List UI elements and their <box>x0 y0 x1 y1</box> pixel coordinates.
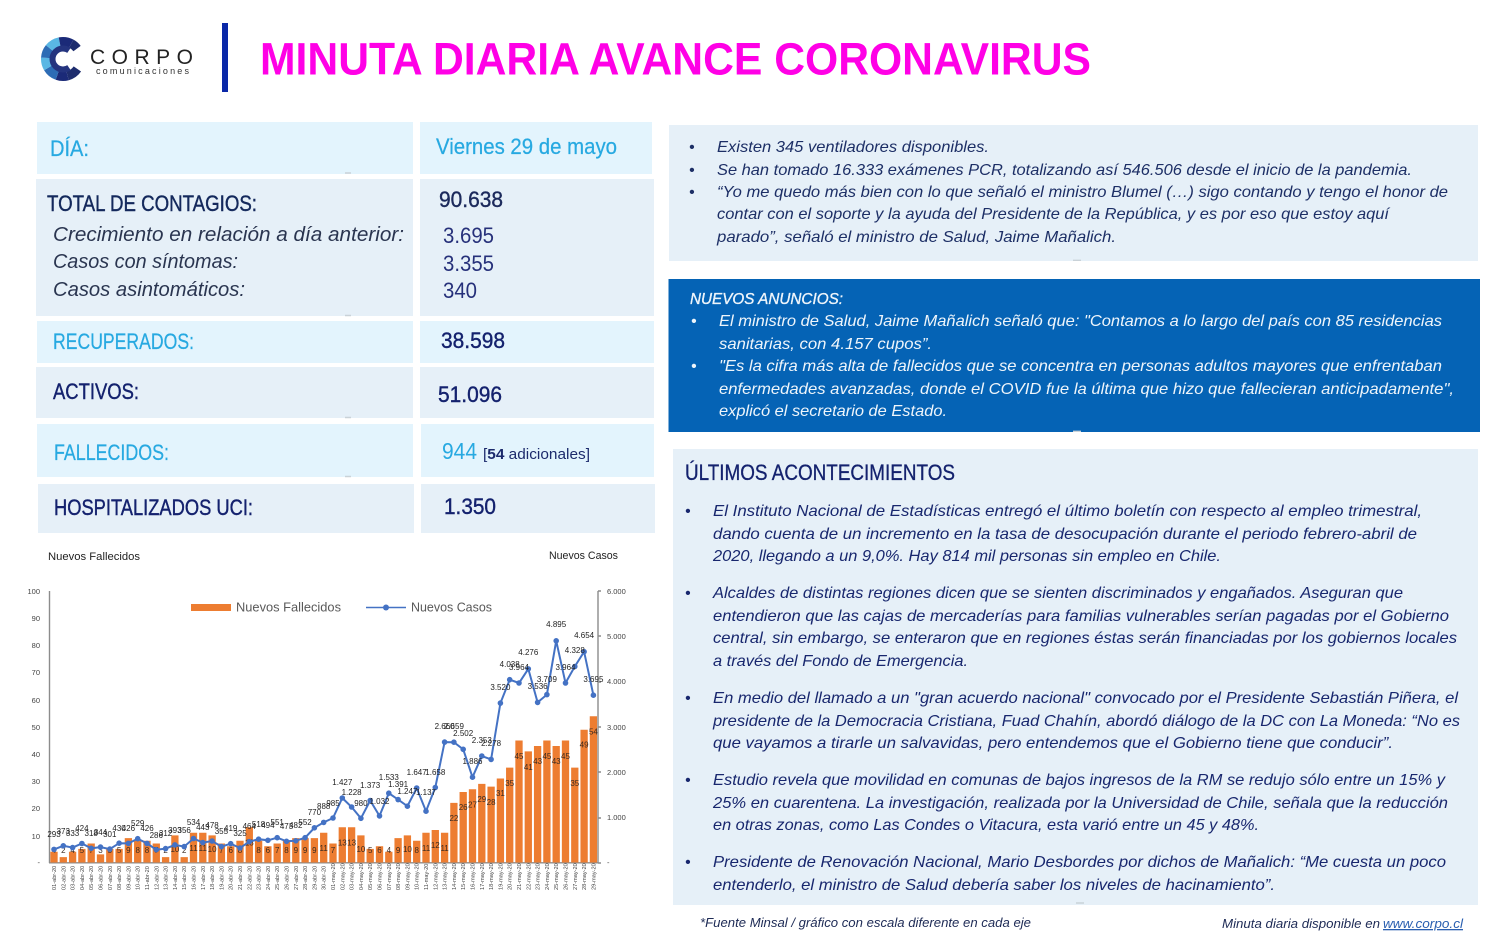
bar value labels: 49 <box>580 740 589 750</box>
left axis scale: 30 <box>32 777 40 786</box>
date axis labels: 27-abr-20 <box>294 866 300 890</box>
panel: últimos acontecimientos <box>673 449 1478 905</box>
bar value labels: 43 <box>533 757 543 766</box>
item: movilidad: 25% en cuarentena. La investigación, realizada por la Universidad de Chile, señala que la reducción <box>712 795 1448 812</box>
panel: hospitalizados UCI: HOSPITALIZADOS UCI: <box>54 495 253 520</box>
date axis labels: 26-may-20 <box>564 863 570 890</box>
panel: fallecidos: FALLECIDOS: <box>54 440 169 465</box>
panel: nuevos anuncios: sanitarias, con 4.157 cupos”. <box>719 336 932 353</box>
date axis labels: 16-may-20 <box>470 863 476 890</box>
item: empleo: 2020, llegando a un 9,0%. Hay 814 mil personas sin empleo en Chile. <box>712 548 1221 565</box>
legend <box>191 600 492 614</box>
line value labels: 344 <box>94 828 108 837</box>
item: empleo <box>685 503 1422 565</box>
line value labels: 355 <box>215 827 229 836</box>
item: acuerdo nacional: En medio del llamado a un "gran acuerdo nacional" convocado por el Presidente Sebastián Piñera, el <box>713 690 1458 707</box>
item: acuerdo nacional <box>685 690 1460 752</box>
line value labels: 473 <box>280 822 294 831</box>
line value labels: 293 <box>47 830 61 839</box>
item: empleo: El Instituto Nacional de Estadísticas entregó el último boletín con respecto al empleo trimestral, <box>713 503 1422 520</box>
date axis labels: 21-may-20 <box>517 863 523 890</box>
date axis labels: 24-may-20 <box>545 863 551 890</box>
line value labels: 2.659 <box>444 722 464 731</box>
bar value labels: 2 <box>182 846 187 855</box>
bar value labels: 4 <box>70 846 75 855</box>
logo: Corpo Comunicaciones <box>46 42 193 76</box>
line value labels: 424 <box>75 824 89 833</box>
bar value labels: 2 <box>163 846 168 855</box>
date axis labels: 07-may-20 <box>387 863 393 890</box>
footnote: disponible en <box>1222 916 1464 931</box>
date axis labels: 02-may-20 <box>340 863 346 890</box>
panel: nuevos anuncios: explicó el secretario de Estado. <box>719 403 947 420</box>
date axis labels: 22-may-20 <box>526 863 532 890</box>
line value labels: 301 <box>103 830 117 839</box>
bar value labels: 13 <box>245 838 254 848</box>
bar value labels: 11 <box>440 844 449 853</box>
right axis scale: 4.000 <box>607 677 626 686</box>
bar value labels: 45 <box>561 752 570 761</box>
bar value labels: 35 <box>505 779 515 788</box>
item: movilidad <box>685 772 1448 834</box>
date axis labels: 28-may-20 <box>582 863 588 890</box>
left axis scale: 100 <box>27 587 40 596</box>
bar value labels: 7 <box>154 846 159 855</box>
logo: Corpo Comunicaciones: comunicaciones <box>96 66 190 76</box>
date axis labels: 15-abr-20 <box>182 866 188 890</box>
line value labels: 1.647 <box>407 768 427 777</box>
line value labels: 325 <box>233 829 247 838</box>
bar value labels: 8 <box>238 846 243 855</box>
left axis scale: 80 <box>32 641 40 650</box>
line value labels <box>47 620 604 840</box>
date axis labels: 29-abr-20 <box>312 866 318 890</box>
panel: nuevos anuncios: El ministro de Salud, Jaime Mañalich señaló que: "Contamos a lo largo del país con 85 residencias <box>719 313 1442 330</box>
panel: hospitalizados UCI: 1.350 <box>444 494 496 519</box>
date axis labels: 08-abr-20 <box>117 866 123 890</box>
line value labels: 2.660 <box>435 722 455 731</box>
date axis labels: 26-abr-20 <box>284 866 290 890</box>
line value labels: 4.276 <box>518 648 539 657</box>
panel: fallecidos: [54 adicionales] <box>483 446 590 463</box>
line value labels: 333 <box>66 829 80 838</box>
date axis labels: 01-abr-20 <box>52 866 58 890</box>
date axis labels: 10-abr-20 <box>136 866 142 890</box>
line value labels: 888 <box>317 802 331 811</box>
panel: nuevos anuncios: • <box>691 358 697 375</box>
line value labels: 3.695 <box>583 675 604 684</box>
line value labels: 1.032 <box>369 797 390 806</box>
bar value labels: 5 <box>108 846 113 855</box>
item: alcaldes <box>685 585 1457 670</box>
date axis labels: 23-abr-20 <box>257 866 263 890</box>
date axis labels: 04-may-20 <box>359 863 365 890</box>
date axis labels: 29-may-20 <box>591 863 597 890</box>
panel: nuevos anuncios: "Es la cifra más alta de fallecidos que se concentra en personas adultos mayores que enfrentaban <box>719 358 1442 375</box>
panel: día: DÍA: <box>50 136 89 161</box>
line value labels: 518 <box>252 820 266 829</box>
line: nuevos casos <box>54 641 593 850</box>
line value labels: 1.228 <box>342 788 362 797</box>
line value labels: 1.427 <box>332 778 353 787</box>
bar value labels: 13 <box>347 838 357 848</box>
line value labels: 534 <box>187 818 201 827</box>
line value labels: 3.709 <box>537 675 557 684</box>
line value labels: 4.654 <box>574 631 595 640</box>
bar value labels: 45 <box>542 752 552 761</box>
line value labels: 1.533 <box>379 773 399 782</box>
bar value labels: 41 <box>524 763 533 772</box>
bar value labels: 10 <box>356 845 366 854</box>
bar value labels: 11 <box>422 844 431 853</box>
bar value labels: 26 <box>459 803 468 812</box>
item: acuerdo nacional: • <box>685 690 691 707</box>
line value labels: 318 <box>85 829 98 838</box>
date axis labels: 11-abr-20 <box>145 866 151 890</box>
panel: nuevos anuncios: enfermedades avanzadas, donde el COVID fue la última que hizo que fallecieran anticipadamente", <box>719 381 1454 398</box>
bar value labels: 8 <box>414 846 419 855</box>
bar value labels: 28 <box>487 798 496 807</box>
bar value labels: 9 <box>396 846 401 855</box>
panel: día <box>37 122 652 174</box>
line value labels: 2.353 <box>472 736 492 745</box>
bar value labels: 43 <box>552 757 561 766</box>
panel: datos generales: • <box>689 139 695 156</box>
panel: datos generales: Se han tomado 16.333 exámenes PCR, totalizando así 546.506 desde el inicio de la pandemia. <box>717 162 1412 179</box>
date axis labels: 06-may-20 <box>378 863 384 890</box>
bar value labels: 29 <box>477 795 487 804</box>
bar value labels: 2 <box>61 846 66 855</box>
date axis labels: 15-may-20 <box>461 863 467 890</box>
line value labels: 1.247 <box>397 787 418 796</box>
footnote: disponible en: Minuta diaria disponible en <box>1222 916 1380 931</box>
panel: nuevos anuncios <box>668 279 1480 432</box>
right axis title: Nuevos Casos <box>549 550 618 562</box>
bar value labels: 8 <box>145 846 150 855</box>
panel: total de contagios: Casos con síntomas: <box>53 250 238 273</box>
date axis labels: 27-may-20 <box>573 863 579 890</box>
footnote: fuente: *Fuente Minsal / gráfico con escala diferente en cada eje <box>700 915 1031 930</box>
panel: recuperados: RECUPERADOS: <box>53 329 194 354</box>
line value labels: 1.658 <box>425 768 446 777</box>
date axis labels: 25-abr-20 <box>275 866 281 890</box>
line value labels: 4.895 <box>546 620 567 629</box>
panel: recuperados <box>37 321 654 363</box>
panel: datos generales: parado”, señaló el ministro de Salud, Jaime Mañalich. <box>716 229 1116 246</box>
panel: activos <box>36 367 654 418</box>
panel: datos generales: • <box>689 162 695 179</box>
item: acuerdo nacional: presidente de la Democracia Cristiana, Fuad Chahín, abordó diálogo de la DC con La Moneda: “No es <box>712 713 1460 730</box>
panel: datos generales: contar con el soporte y la ayuda del Presidente de la República, y es por eso que estoy aquí <box>717 206 1391 223</box>
item: Desbordes: entenderlo, el ministro de Salud debería saber los niveles de hacinamiento”. <box>713 877 1275 894</box>
date axis labels: 04-abr-20 <box>80 866 86 890</box>
bar value labels: 4 <box>387 846 392 855</box>
panel: datos generales: “Yo me quedo más bien con lo que señaló el ministro Blumel (…) sigo contando y tengo el honor de <box>717 184 1448 201</box>
date axis labels: 01-may-20 <box>331 863 337 890</box>
panel: día: Viernes 29 de mayo <box>436 134 617 159</box>
date axis labels: 14-may-20 <box>452 863 458 890</box>
left axis scale: 70 <box>32 668 40 677</box>
bar value labels: 12 <box>431 841 440 850</box>
bar value labels: 6 <box>377 846 382 855</box>
date axis labels: 02-abr-20 <box>61 866 67 890</box>
footnote: disponible en: www.corpo.cl <box>1383 916 1464 931</box>
date axis labels: 20-abr-20 <box>229 866 235 890</box>
line value labels: 312 <box>159 829 173 838</box>
bar value labels: 9 <box>303 846 308 855</box>
date axis labels: 20-may-20 <box>508 863 514 890</box>
bar value labels: 13 <box>338 838 347 848</box>
left axis scale: 50 <box>32 723 40 732</box>
date axis labels: 11-may-20 <box>424 864 430 890</box>
bar value labels: 7 <box>89 846 94 855</box>
date axis labels: 12-may-20 <box>433 863 439 890</box>
bar value labels: 10 <box>403 845 412 854</box>
date axis labels: 17-abr-20 <box>201 866 207 890</box>
panel: total de contagios: Crecimiento en relación a día anterior: <box>53 223 404 246</box>
bar value labels: 10 <box>208 845 217 854</box>
item: empleo: • <box>685 503 691 520</box>
date axis labels: 25-may-20 <box>554 863 560 890</box>
item: acuerdo nacional: que vayamos a tirarle un salvavidas, pero entendemos que el Gobierno tiene que conducir”. <box>713 735 1393 752</box>
line value labels: 393 <box>168 826 182 835</box>
item: Desbordes: • <box>685 854 691 871</box>
left axis scale: 90 <box>32 614 40 623</box>
left axis scale: 60 <box>32 696 40 705</box>
left axis scale: - <box>38 858 40 867</box>
bar value labels: 45 <box>515 752 524 761</box>
item: Desbordes: Presidente de Renovación Nacional, Mario Desbordes por dichos de Mañalich: “Me cuesta un poco <box>713 854 1446 871</box>
date axis labels: 18-abr-20 <box>210 866 216 890</box>
line value labels: 552 <box>298 818 312 827</box>
bar value labels: 35 <box>570 779 580 788</box>
date axis labels: 09-abr-20 <box>126 866 132 890</box>
header divider bar <box>222 23 228 92</box>
line value labels: 1.391 <box>388 780 409 789</box>
heading: ÚLTIMOS ACONTECIMIENTOS <box>685 460 955 485</box>
panel: nuevos anuncios: • <box>691 313 697 330</box>
line value labels: 1.886 <box>462 757 483 766</box>
line value labels: 430 <box>112 824 126 833</box>
line value labels: 980 <box>354 799 368 808</box>
bar value labels: 9 <box>294 846 299 855</box>
panel: recuperados: 38.598 <box>441 328 505 353</box>
right axis scale: 2.000 <box>607 768 626 777</box>
item: movilidad: Estudio revela que movilidad en comunas de bajos ingresos de la RM se redujo sólo entre un 15% y <box>713 772 1446 789</box>
panel: datos generales: Existen 345 ventiladores disponibles. <box>717 139 989 156</box>
line value labels: 985 <box>326 799 340 808</box>
bar value labels: 4 <box>52 846 57 855</box>
line value labels: 4.328 <box>565 646 585 655</box>
right axis scale: 3.000 <box>607 723 626 732</box>
panel: activos: 51.096 <box>438 382 502 407</box>
right axis scale: 6.000 <box>607 587 626 596</box>
line value labels: 443 <box>196 823 210 832</box>
date axis labels: 06-abr-20 <box>98 866 104 890</box>
bar value labels: 8 <box>256 846 261 855</box>
date axis labels: 19-abr-20 <box>219 866 225 890</box>
date axis labels: 09-may-20 <box>405 863 411 890</box>
line value labels: 551 <box>271 818 284 827</box>
line value labels: 482 <box>289 821 303 830</box>
bar value labels: 3 <box>98 846 103 855</box>
bar value labels: 11 <box>320 844 328 853</box>
axes lines <box>49 591 601 863</box>
bar value labels: 9 <box>126 846 131 855</box>
date axis labels: 22-abr-20 <box>247 866 253 890</box>
bar value labels: 8 <box>135 846 140 855</box>
panel: activos: ACTIVOS: <box>53 379 139 404</box>
legend: Nuevos Fallecidos <box>236 600 341 614</box>
right axis scale: - <box>607 858 610 867</box>
line value labels: 426 <box>140 824 154 833</box>
date axis labels: 03-abr-20 <box>71 866 77 890</box>
date axis labels: 30-abr-20 <box>322 866 328 890</box>
line value labels: 478 <box>205 821 219 830</box>
line value labels: 770 <box>308 808 322 817</box>
line value labels: 373 <box>57 827 71 836</box>
date axis labels: 14-abr-20 <box>173 866 179 890</box>
bar value labels: 5 <box>117 846 122 855</box>
bar value labels: 7 <box>275 846 280 855</box>
item: alcaldes: a través del Fondo de Emergencia. <box>713 653 968 670</box>
item: movilidad: en otras zonas, como Las Condes o Vitacura, esta varió entre un 45 y 48%. <box>713 817 1259 834</box>
line value labels: 2.502 <box>453 729 474 738</box>
left axis scale: 40 <box>32 750 40 759</box>
date axis labels: 17-may-20 <box>480 863 486 890</box>
line value labels: 4.038 <box>500 660 520 669</box>
line value labels: 3.964 <box>555 663 576 672</box>
line value labels: 419 <box>224 824 238 833</box>
item: alcaldes: • <box>685 585 691 602</box>
item: alcaldes: Alcaldes de distintas regiones dicen que se sienten discriminados y engañados. Aseguran que <box>712 585 1403 602</box>
line markers <box>54 641 593 850</box>
panel: total de contagios: TOTAL DE CONTAGIOS: <box>47 191 257 216</box>
left axis scale <box>27 587 40 867</box>
line value labels: 464 <box>243 822 257 831</box>
panel: hospitalizados UCI <box>38 484 655 533</box>
item: alcaldes: entendieron que las cajas de mercaderías para familias vulnerables serían pagadas por el Gobierno <box>713 608 1449 625</box>
bar value labels: 11 <box>199 844 207 853</box>
legend: Nuevos Casos <box>411 600 492 614</box>
date axis labels: 13-may-20 <box>443 863 449 890</box>
bar value labels <box>52 728 598 855</box>
bar value labels: 7 <box>219 846 224 855</box>
panel: nuevos anuncios: NUEVOS ANUNCIOS: <box>690 291 843 308</box>
panel: fallecidos <box>37 424 654 477</box>
bars: nuevos fallecidos <box>54 716 593 862</box>
line value labels: 2.278 <box>481 739 502 748</box>
right axis scale <box>607 587 626 867</box>
chart: nuevos fallecidos y nuevos casos <box>27 550 626 890</box>
line value labels: 3.536 <box>528 682 548 691</box>
line value labels: 426 <box>122 824 136 833</box>
date axis labels: 23-may-20 <box>536 863 542 890</box>
bar value labels: 5 <box>80 846 85 855</box>
bar value labels: 7 <box>331 846 336 855</box>
left axis title: Nuevos Fallecidos <box>48 551 141 563</box>
item: empleo: dando cuenta de un incremento en la tasa de desocupación durante el periodo febrero-abril de <box>713 526 1417 543</box>
panel: total de contagios: 3.355 <box>443 251 494 276</box>
item: movilidad: • <box>685 772 691 789</box>
item: alcaldes: central, sin embargo, se enteraron que en regiones éstas serán financiadas por los gobiernos locales <box>713 630 1457 647</box>
panel: total de contagios <box>36 179 654 316</box>
panel: datos generales: • <box>689 184 695 201</box>
title: MINUTA DIARIA AVANCE CORONAVIRUS <box>260 34 1091 84</box>
line value labels: 1.373 <box>360 781 381 790</box>
date axis labels: 18-may-20 <box>489 863 495 890</box>
bar value labels: 22 <box>449 814 459 823</box>
bar value labels: 27 <box>468 800 477 810</box>
left axis scale: 10 <box>32 832 40 841</box>
line value labels: 3.520 <box>490 683 511 692</box>
bar value labels: 9 <box>312 846 317 855</box>
line value labels: 3.964 <box>509 663 530 672</box>
line value labels: 286 <box>150 831 164 840</box>
panel: total de contagios: 3.695 <box>443 223 494 248</box>
date axis labels: 21-abr-20 <box>238 866 244 890</box>
date axis labels: 05-may-20 <box>368 863 374 890</box>
line value labels: 494 <box>261 821 275 830</box>
date axis labels: 16-abr-20 <box>192 866 198 890</box>
right axis scale: 5.000 <box>607 632 626 641</box>
left axis scale: 20 <box>32 804 40 813</box>
date axis labels: 08-may-20 <box>396 863 402 890</box>
right axis scale: 1.000 <box>607 813 626 822</box>
panel: total de contagios: 340 <box>443 278 477 303</box>
date axis labels: 13-abr-20 <box>164 866 170 890</box>
item: Desbordes <box>685 854 1446 894</box>
line value labels: 529 <box>131 819 145 828</box>
bar value labels: 10 <box>170 845 180 854</box>
bar value labels: 6 <box>266 846 271 855</box>
bar value labels: 8 <box>284 846 289 855</box>
date axis labels: 24-abr-20 <box>266 866 272 890</box>
bar value labels: 54 <box>589 728 598 736</box>
logo: Corpo Comunicaciones: CORPO <box>90 46 193 69</box>
panel: fallecidos: 944 <box>442 438 477 464</box>
bar value labels: 31 <box>496 789 505 798</box>
date axis labels: 19-may-20 <box>498 863 504 890</box>
line value labels: 1.137 <box>416 788 437 797</box>
bar value labels: 11 <box>189 844 198 853</box>
date axis labels: 10-may-20 <box>415 863 421 890</box>
date axis labels: 03-may-20 <box>350 863 356 890</box>
date axis labels <box>52 863 597 890</box>
bar value labels: 5 <box>368 846 373 855</box>
date axis labels: 28-abr-20 <box>303 866 309 890</box>
date axis labels: 07-abr-20 <box>108 866 114 890</box>
date axis labels: 12-abr-20 <box>154 866 160 890</box>
line value labels: 356 <box>178 826 191 835</box>
panel: total de contagios: 90.638 <box>439 187 503 212</box>
date axis labels: 05-abr-20 <box>89 866 95 890</box>
panel: total de contagios: Casos asintomáticos: <box>53 278 245 301</box>
panel: datos generales <box>669 125 1478 261</box>
bar value labels: 6 <box>228 846 233 855</box>
